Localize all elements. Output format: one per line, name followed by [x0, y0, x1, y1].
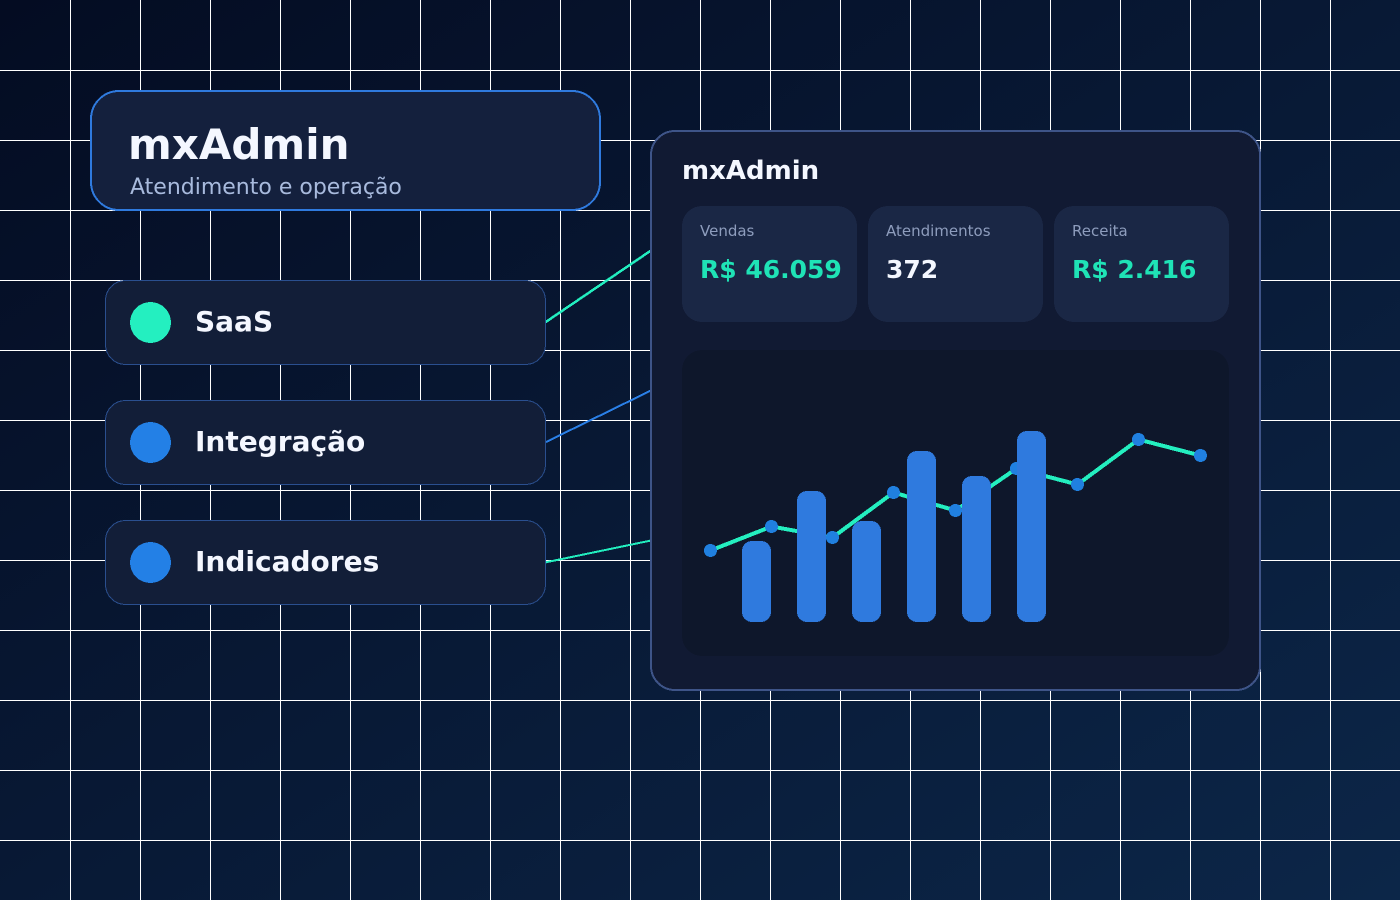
bars [742, 431, 1046, 622]
feature: SaaS [106, 280, 546, 364]
KPI card: Receita: R$ 2.416 [1072, 255, 1196, 284]
connector: SaaS to dashboard [545, 250, 651, 322]
icon: Integração dot [130, 422, 171, 463]
KPI card: Atendimentos [868, 206, 1043, 322]
connector: Integração to dashboard [545, 390, 651, 442]
label: Integração: Integração [195, 425, 365, 458]
KPI card: Vendas [682, 206, 857, 322]
line markers [704, 433, 1207, 557]
KPI card: Atendimentos: 372 [886, 255, 938, 284]
icon: Indicadores dot [130, 542, 171, 583]
title: mxAdmin [128, 120, 349, 169]
label: SaaS: SaaS [195, 305, 273, 338]
KPI card: Vendas: R$ 46.059 [700, 255, 842, 284]
chart: sales line and bars [682, 350, 1229, 656]
line series [710, 440, 1200, 550]
subtitle: Atendimento e operação [130, 175, 402, 200]
KPI card: Atendimentos: Atendimentos [886, 222, 991, 240]
title card [91, 91, 600, 210]
connector: Indicadores to dashboard [545, 540, 651, 562]
dashboard title: mxAdmin [682, 156, 819, 186]
label: Indicadores: Indicadores [195, 545, 379, 578]
panel: dashboard [651, 131, 1260, 690]
icon: SaaS dot [130, 302, 171, 343]
feature: Integração [106, 400, 546, 484]
KPI card: Vendas: Vendas [700, 222, 755, 240]
KPI card: Receita: Receita [1072, 222, 1128, 240]
KPI card: Receita [1054, 206, 1229, 322]
feature: Indicadores [106, 520, 546, 604]
